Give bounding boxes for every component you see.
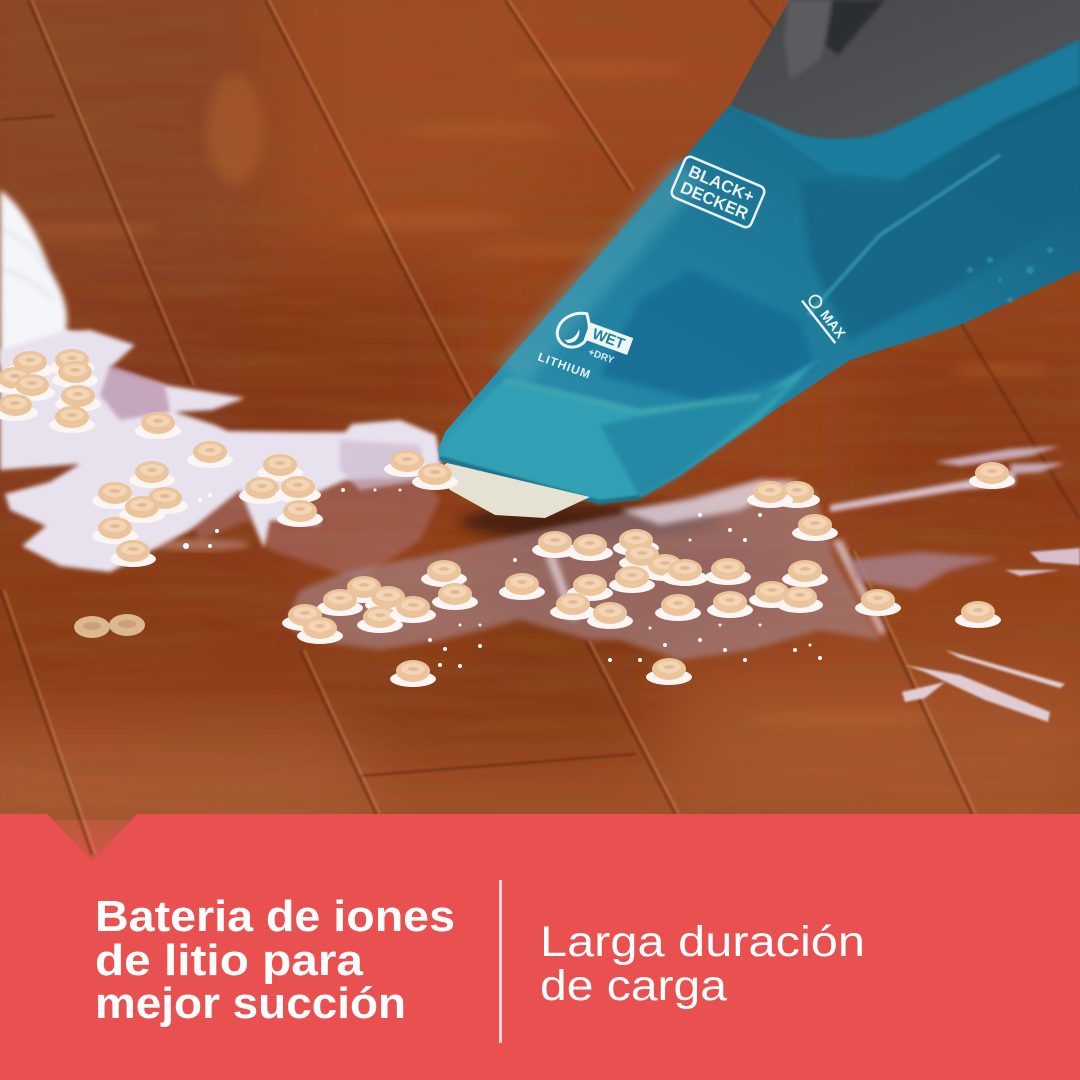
- vacuum brand logo: [670, 155, 766, 229]
- handheld vacuum: [435, 0, 1080, 518]
- vacuum grey body: [730, 0, 1080, 139]
- cereal pieces: pair on bare floor: [74, 614, 145, 638]
- divider: [499, 880, 502, 1043]
- heading: Bateria de iones: [95, 892, 455, 941]
- vacuum max fill mark: MAX: [817, 307, 849, 342]
- heading: de litio para: [95, 936, 364, 985]
- plank seams: [0, 0, 1080, 855]
- spilled milk: left pool: [0, 330, 442, 580]
- vacuum wet and dry logo: +DRY: [587, 347, 616, 366]
- heading: mejor succión: [95, 979, 406, 1028]
- wood floor background: [0, 0, 1080, 855]
- vacuum wet and dry logo: WET: [590, 325, 627, 353]
- red caption panel with notch: [0, 814, 1080, 1080]
- vacuum brand logo: DECKER: [678, 178, 751, 224]
- vacuum wet and dry logo: [552, 306, 636, 370]
- cereal pieces: left cluster: [0, 349, 458, 567]
- subheading: [540, 918, 865, 1010]
- cereal pieces: centre and right cluster: [282, 462, 1015, 687]
- subheading: Larga duración: [540, 918, 865, 966]
- vacuum brand logo: BLACK+: [686, 162, 757, 207]
- heading: [95, 892, 455, 1028]
- subheading: de carga: [540, 962, 727, 1010]
- vacuum teal tank: [438, 40, 1080, 503]
- spilled milk: centre and right pool: [285, 446, 1080, 722]
- vacuum white nozzle tip: [435, 463, 590, 518]
- vacuum lithium label: LITHIUM: [536, 350, 593, 382]
- white object at left edge: [0, 190, 90, 365]
- vacuum max fill mark: [802, 290, 849, 343]
